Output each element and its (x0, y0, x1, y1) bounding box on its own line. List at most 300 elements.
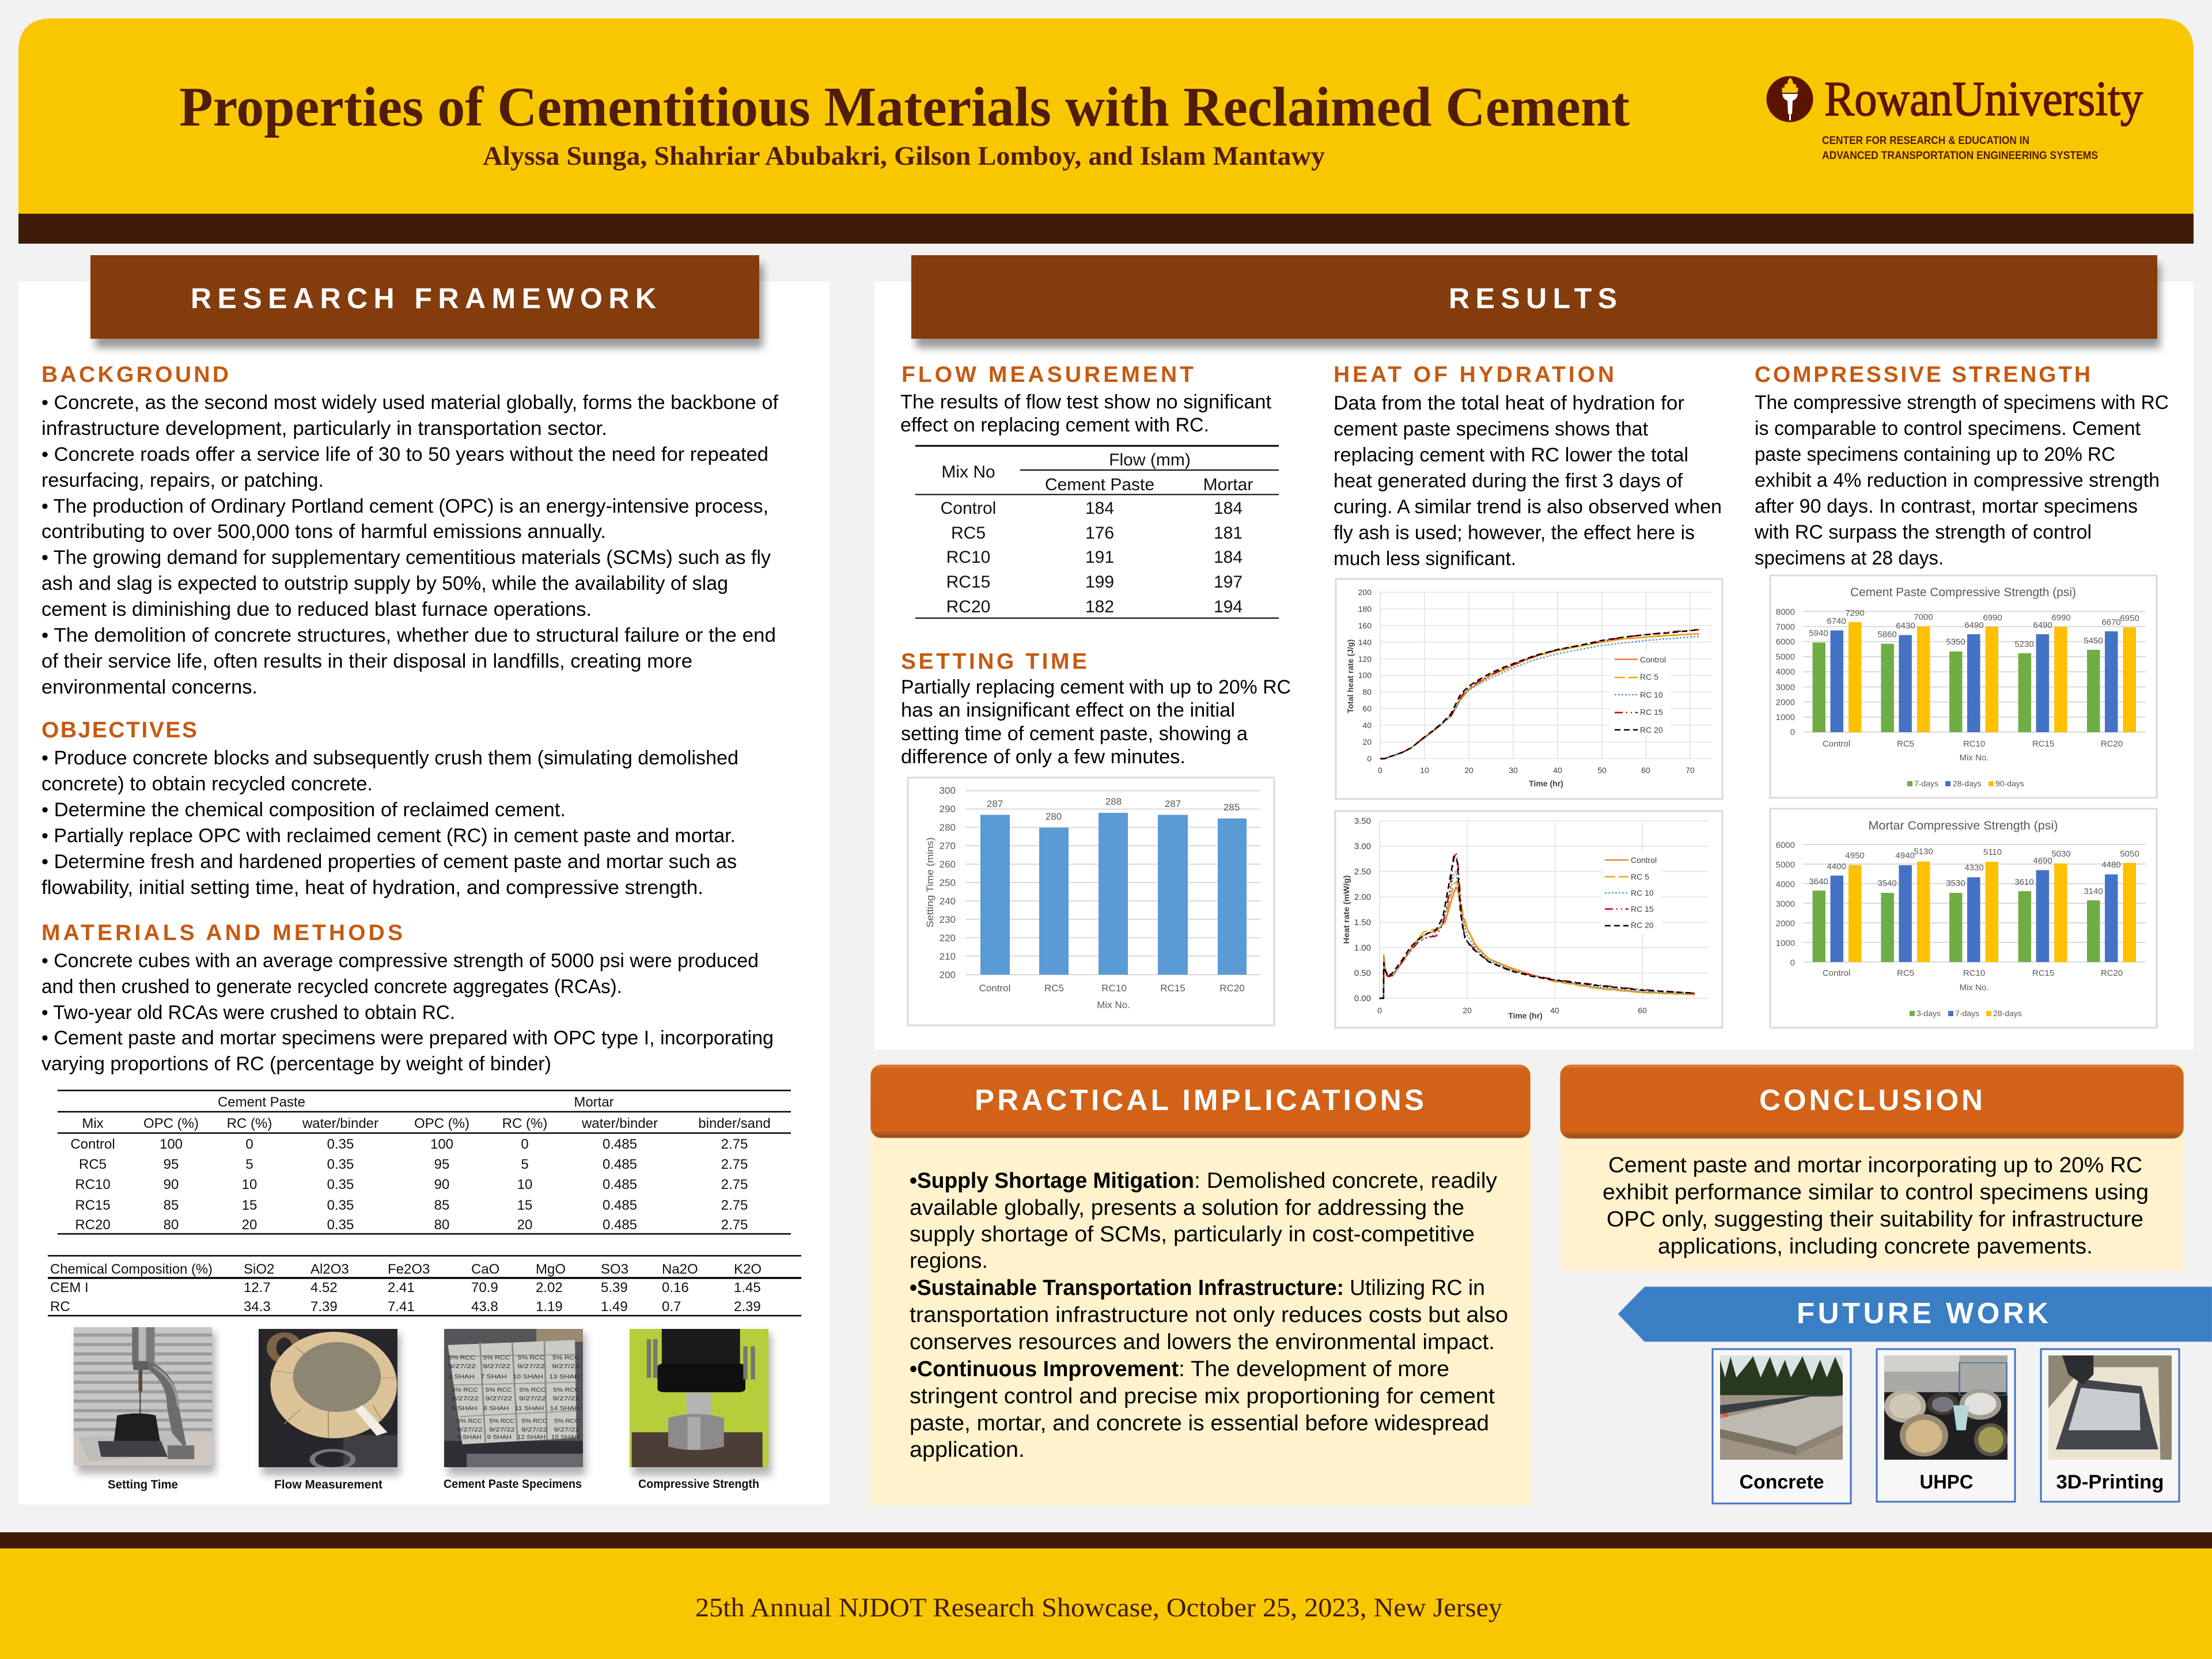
bar chart: mortar compressive strength: 3530 (1946, 878, 1965, 888)
chemical composition table: RC (50, 1299, 70, 1315)
line chart: total heat: 140 (1358, 638, 1372, 647)
mix proportions table: 0.35 (327, 1198, 354, 1213)
line chart: total heat: 80 (1362, 687, 1372, 696)
setting time text (901, 649, 1291, 768)
photo: cement paste specimens: 9/27/22 9/27/22 9/27/22 9/27/22 (448, 1363, 580, 1370)
bar chart: cement paste compressive strength: Control (1823, 739, 1850, 749)
mix proportions table: 85 (434, 1198, 449, 1213)
bar chart: setting time: 230 (940, 914, 956, 925)
flow measurement text: effect on replacing cement with RC. (900, 414, 1209, 436)
chemical composition table: 5.39 (601, 1280, 628, 1296)
chemical composition table: MgO (536, 1262, 566, 1277)
bar chart: mortar compressive strength: 2000 (1776, 919, 1795, 929)
mix proportions table: 100 (430, 1137, 453, 1152)
bar chart: cement paste compressive strength: 7290 (1845, 608, 1865, 618)
heading: research framework: RESEARCH FRAMEWORK (191, 282, 656, 315)
implications text: paste, mortar, and concrete is essential before widespread (910, 1411, 1489, 1435)
compressive strength text: with RC surpass the strength of control (1754, 521, 2092, 543)
bar chart: mortar compressive strength: 3000 (1776, 899, 1795, 909)
bar chart: cement paste compressive strength: 5000 (1776, 652, 1795, 662)
chemical composition table: Chemical Composition (%) (50, 1262, 213, 1277)
line chart: heat rate (1335, 811, 1722, 1028)
bar chart: cement paste compressive strength: 5940 (1809, 628, 1828, 638)
heading: results (911, 255, 2157, 339)
bar chart: mortar compressive strength: Control (1823, 968, 1850, 978)
bar chart: setting time: 270 (940, 840, 956, 851)
line chart: total heat: 120 (1358, 654, 1372, 664)
future work arrow banner: FUTURE WORK (1797, 1297, 2048, 1330)
chemical composition table: 70.9 (471, 1280, 498, 1296)
line chart: total heat: 50 (1597, 766, 1607, 775)
bar chart: setting time: 288 (1105, 796, 1122, 807)
bar chart: cement paste compressive strength: 1000 (1776, 713, 1795, 722)
line chart: heat rate: 2.00 (1354, 892, 1371, 902)
heat of hydration text: replacing cement with RC lower the total (1334, 444, 1688, 466)
heat of hydration text: much less significant. (1334, 548, 1516, 570)
bar chart: setting time: Mix No. (1097, 999, 1130, 1010)
objectives section: concrete) to obtain recycled concrete. (41, 773, 373, 795)
bar chart: setting time: Setting Time (mins) (925, 838, 935, 927)
bar chart: cement paste compressive strength: 7-days (1914, 779, 1938, 788)
photo: cement paste specimens: 5% RCC 5% RCC 5% RCC 5% RCC (448, 1355, 579, 1361)
chemical composition table: 12.7 (244, 1280, 271, 1296)
chemical composition table: 2.02 (536, 1280, 563, 1296)
line chart: total heat: RC 15 (1640, 707, 1663, 717)
mix proportions table: RC20 (75, 1217, 111, 1233)
bar chart: mortar compressive strength: RC15 (2032, 968, 2054, 978)
mix proportions table: 10 (242, 1177, 257, 1192)
flow table: 197 (1214, 573, 1243, 592)
background section: ash and slag is expected to outstrip supply by 50%, while the availability of slag (41, 573, 728, 594)
compressive strength text: after 90 days. In contrast, mortar specimens (1755, 495, 2138, 517)
mix proportions table: 5 (245, 1157, 253, 1172)
mix proportions table: 0.485 (603, 1217, 637, 1233)
chemical composition table: CEM I (50, 1280, 89, 1296)
mix proportions table: RC15 (75, 1198, 111, 1213)
logo: Rowan University: CENTER FOR RESEARCH & EDUCATION IN (1822, 135, 2029, 147)
objectives section (41, 718, 738, 899)
implications text: regions. (910, 1249, 988, 1273)
panel: research framework (18, 255, 830, 1505)
objectives section: • Partially replace OPC with reclaimed cement (RC) in cement paste and mortar. (41, 825, 736, 847)
bar chart: cement paste compressive strength: 6000 (1776, 637, 1795, 647)
mix proportions table: 100 (160, 1137, 183, 1152)
bar chart: cement paste compressive strength: 3000 (1776, 683, 1795, 692)
compressive strength text (1754, 362, 2169, 569)
label: 3D-Printing (2056, 1471, 2164, 1493)
line chart: heat rate: Heat rate (mW/g) (1342, 876, 1351, 944)
flow table: Control (941, 499, 996, 518)
chemical composition table: 1.45 (734, 1280, 761, 1296)
objectives section: • Determine the chemical composition of reclaimed cement. (41, 799, 566, 821)
mix proportions table: 0.485 (603, 1198, 637, 1213)
mix proportions table: RC (%) (227, 1116, 272, 1131)
mix proportions table: 15 (242, 1198, 257, 1213)
future work arrow banner (1618, 1287, 2212, 1342)
implications text: supply shortage of SCMs, particularly in cost-competitive (910, 1222, 1475, 1247)
line chart: heat rate: 0.00 (1354, 994, 1371, 1003)
bar chart: mortar compressive strength: 3640 (1809, 877, 1828, 887)
mix proportions table: Cement Paste (218, 1094, 305, 1110)
heat of hydration text: heat generated during the first 3 days of (1334, 470, 1683, 492)
implications text: conserves resources and lowers the environmental impact. (910, 1330, 1495, 1354)
line chart: heat rate: 40 (1550, 1006, 1559, 1015)
implications text: •Continuous Improvement (910, 1357, 1179, 1381)
mix proportions table: Mix (82, 1116, 104, 1131)
bar chart: cement paste compressive strength: Cement Paste Compressive Strength (psi) (1850, 586, 2076, 599)
bar chart: setting time: Control (979, 983, 1010, 994)
implications text (910, 1169, 1508, 1462)
line chart: total heat: 10 (1420, 766, 1429, 775)
implications text: stringent control and precise mix proportioning for cement (910, 1384, 1495, 1408)
future work card: 3D-printing (2041, 1349, 2179, 1502)
setting time text: SETTING TIME (901, 649, 1087, 674)
panel: conclusion (1560, 1065, 2184, 1271)
chemical composition table: SiO2 (244, 1262, 274, 1277)
bar chart: mortar compressive strength (1770, 809, 2157, 1028)
chemical composition table: Fe2O3 (388, 1262, 430, 1277)
flow table: RC20 (946, 597, 990, 616)
flow table: RC15 (946, 573, 990, 592)
objectives section: OBJECTIVES (41, 718, 197, 743)
bar chart: mortar compressive strength: 5030 (2051, 849, 2071, 859)
chemical composition table: SO3 (601, 1262, 628, 1277)
setting time text: setting time of cement paste, showing a (901, 723, 1248, 745)
photo: cement paste specimens: 5% RCC 5% RCC 5% RCC 5% RCC (452, 1387, 579, 1393)
flow table (915, 446, 1279, 618)
flow table: 182 (1085, 597, 1114, 616)
bar chart: cement paste compressive strength: 0 (1790, 728, 1795, 737)
photo: cement paste specimens: 9/27/22 9/27/22 9/27/22 9/27/22 (457, 1427, 580, 1433)
line chart: total heat: 40 (1362, 721, 1372, 730)
mix proportions table: 80 (434, 1217, 449, 1233)
flow table: 176 (1085, 524, 1114, 543)
bar chart: mortar compressive strength: 5110 (1983, 847, 2002, 857)
objectives section: • Produce concrete blocks and subsequently crush them (simulating demolished (41, 747, 738, 769)
header band (18, 18, 2194, 244)
caption: Cement Paste Specimens (444, 1478, 582, 1491)
bar chart: mortar compressive strength: 4480 (2101, 860, 2121, 870)
line chart: heat rate: RC 5 (1631, 872, 1649, 881)
flow table: 199 (1085, 573, 1114, 592)
flow measurement text: FLOW MEASUREMENT (902, 362, 1194, 387)
chemical composition table: 7.39 (310, 1299, 338, 1315)
mix proportions table: RC5 (79, 1157, 107, 1172)
line chart: total heat: 180 (1358, 604, 1372, 613)
heading: practical implications (871, 1065, 1530, 1138)
caption: Compressive Strength (638, 1478, 759, 1491)
implications text: : Demolished concrete, readily (1194, 1169, 1497, 1193)
conclusion text (1603, 1153, 2149, 1259)
bar chart: cement paste compressive strength: 90-days (1995, 779, 2024, 788)
heat of hydration text (1334, 362, 1722, 570)
chemical composition table: 0.7 (662, 1299, 681, 1315)
implications text: transportation infrastructure not only reduces costs but also (910, 1303, 1508, 1327)
bar chart: setting time: 287 (1165, 798, 1181, 809)
title: Properties of Cementitious Materials with Reclaimed Cement (179, 76, 1630, 138)
background section: resurfacing, repairs, or patching. (41, 469, 324, 491)
bar chart: setting time: 210 (940, 951, 956, 962)
mix proportions table: 20 (517, 1217, 532, 1233)
line chart: heat rate: Control (1631, 855, 1657, 865)
bar chart: setting time: 250 (940, 877, 956, 888)
line chart: heat rate: 20 (1463, 1006, 1472, 1015)
bar chart: cement paste compressive strength: 6670 (2101, 618, 2121, 627)
mix proportions table: 85 (164, 1198, 179, 1213)
mix proportions table: 2.75 (721, 1137, 748, 1152)
mix proportions table: 10 (517, 1177, 532, 1192)
materials and methods section: and then crushed to generate recycled concrete aggregates (RCAs). (41, 976, 622, 998)
panel: results (874, 255, 2194, 1050)
bar chart: setting time: RC15 (1160, 983, 1185, 994)
line chart: total heat: 70 (1685, 766, 1695, 775)
mix proportions table: 0.35 (327, 1177, 354, 1192)
authors: Alyssa Sunga, Shahriar Abubakri, Gilson Lomboy, and Islam Mantawy (483, 141, 1325, 171)
chemical composition table: 7.41 (388, 1299, 415, 1315)
photo: cement paste specimens: 9/27/22 9/27/22 9/27/22 9/27/22 (452, 1396, 580, 1402)
bar chart: mortar compressive strength: 7-days (1955, 1009, 1979, 1018)
line chart: heat rate: 1.00 (1354, 943, 1371, 953)
background section: • Concrete, as the second most widely used material globally, forms the backbone of (41, 392, 779, 414)
line chart: heat rate: 0 (1377, 1006, 1382, 1015)
mix proportions table: Control (70, 1137, 115, 1152)
background section: • The demolition of concrete structures, whether due to structural failure or the end (41, 624, 776, 646)
background section: of their service life, often results in their disposal in landfills, creating more (41, 650, 692, 672)
photo: flow measurement (259, 1329, 400, 1491)
bar chart: mortar compressive strength: 5130 (1914, 847, 1933, 857)
materials and methods section: • Concrete cubes with an average compressive strength of 5000 psi were produced (41, 950, 759, 972)
background section: infrastructure development, particularly in transportation sector. (41, 418, 607, 440)
objectives section: flowability, initial setting time, heat of hydration, and compressive strength. (41, 877, 703, 899)
compressive strength text: COMPRESSIVE STRENGTH (1755, 362, 2090, 387)
bar chart: mortar compressive strength: 3610 (2014, 877, 2034, 887)
panel: practical implications (870, 1065, 1531, 1505)
background section: BACKGROUND (41, 362, 229, 387)
label: UHPC (1919, 1471, 1974, 1493)
flow measurement text (900, 362, 1272, 436)
line chart: total heat: 20 (1362, 737, 1372, 747)
bar chart: mortar compressive strength: 3140 (2084, 887, 2103, 896)
line chart: heat rate: 1.50 (1354, 918, 1371, 927)
background section: environmental concerns. (41, 676, 257, 698)
background section: contributing to over 500,000 tons of harmful emissions annually. (41, 521, 606, 543)
bar chart: cement paste compressive strength: 7000 (1914, 612, 1933, 622)
bar chart: cement paste compressive strength: 6430 (1896, 621, 1915, 631)
background section: • Concrete roads offer a service life of 30 to 50 years without the need for repeated (41, 444, 768, 465)
line chart: total heat: 30 (1509, 766, 1518, 775)
mix proportions table: OPC (%) (414, 1116, 469, 1131)
logo: Rowan University: RowanUniversity (1824, 71, 2143, 126)
mix proportions table: Mortar (574, 1094, 614, 1110)
bar chart: cement paste compressive strength: 6490 (2033, 620, 2052, 630)
implications text: •Supply Shortage Mitigation (910, 1169, 1194, 1193)
background section: • The production of Ordinary Portland cement (OPC) is an energy-intensive process, (41, 495, 768, 517)
mix proportions table: RC (%) (502, 1116, 547, 1131)
flow table: RC10 (946, 548, 990, 567)
line chart: total heat (1336, 579, 1722, 799)
bar chart: cement paste compressive strength: 5350 (1946, 637, 1965, 647)
flow table: Mix No (941, 463, 995, 482)
bar chart: setting time: 220 (940, 933, 956, 944)
compressive strength text: The compressive strength of specimens with RC (1755, 392, 2169, 414)
line chart: total heat: RC 5 (1640, 672, 1658, 681)
bar chart: mortar compressive strength: 6000 (1776, 840, 1795, 850)
line chart: total heat: 60 (1362, 704, 1372, 713)
conclusion text: Cement paste and mortar incorporating up to 20% RC (1608, 1153, 2142, 1177)
chemical composition table: CaO (471, 1262, 499, 1277)
bar chart: cement paste compressive strength: RC20 (2101, 739, 2123, 749)
materials and methods section: varying proportions of RC (percentage by weight of binder) (41, 1053, 551, 1075)
flow measurement text: The results of flow test show no significant (900, 391, 1272, 413)
line chart: heat rate: Time (hr) (1508, 1011, 1543, 1020)
mix proportions table: 0.485 (603, 1137, 637, 1152)
flow table: 184 (1214, 548, 1243, 567)
bar chart: setting time: RC20 (1219, 983, 1245, 994)
setting time text: Partially replacing cement with up to 20% RC (901, 676, 1291, 698)
line chart: total heat: Control (1640, 655, 1666, 664)
mix proportions table: 0.35 (327, 1157, 354, 1172)
bar chart: cement paste compressive strength: 6740 (1827, 616, 1846, 626)
photo: cement paste specimens: 6 SHAH 9 SHAH 12 SHAH 15 SHAH (457, 1434, 579, 1441)
bar chart: setting time: RC10 (1101, 983, 1127, 994)
mix proportions table: OPC (%) (143, 1116, 199, 1131)
compressive strength text: is comparable to control specimens. Cement (1755, 418, 2141, 440)
caption: Flow Measurement (274, 1478, 382, 1491)
compressive strength text: paste specimens containing up to 20% RC (1755, 444, 2115, 465)
mix proportions table: RC10 (75, 1177, 111, 1192)
conclusion text: OPC only, suggesting their suitability for infrastructure (1607, 1207, 2143, 1232)
heading: results: RESULTS (1449, 282, 1617, 315)
mix proportions table: 20 (242, 1217, 257, 1233)
bar chart: setting time: 280 (1046, 811, 1062, 822)
mix proportions table: 95 (164, 1157, 179, 1172)
line chart: total heat: Time (hr) (1529, 779, 1563, 788)
photo: cement paste specimens (444, 1329, 586, 1491)
bar chart: mortar compressive strength: RC5 (1897, 968, 1914, 978)
bar chart: mortar compressive strength: 4330 (1964, 863, 1984, 873)
flow table: Flow (mm) (1109, 450, 1191, 469)
bar chart: cement paste compressive strength: 5450 (2084, 636, 2103, 646)
flow table: 184 (1214, 499, 1243, 518)
photo: cement paste specimens: 5 SHAH 8 SHAH 11 SHAH 14 SHAH (452, 1406, 579, 1412)
chemical composition table: 2.41 (388, 1280, 415, 1296)
background section: cement is diminishing due to reduced blast furnace operations. (41, 599, 592, 620)
heat of hydration text: Data from the total heat of hydration for (1334, 392, 1684, 414)
line chart: heat rate: 60 (1638, 1006, 1647, 1015)
bar chart: cement paste compressive strength: 6490 (1964, 620, 1984, 630)
heat of hydration text: curing. A similar trend is also observed when (1334, 496, 1722, 518)
mix proportions table: binder/sand (698, 1116, 771, 1131)
flow table: 181 (1214, 524, 1243, 543)
line chart: total heat: 160 (1358, 621, 1372, 630)
mix proportions table: 0.485 (603, 1177, 637, 1192)
chemical composition table: 0.16 (662, 1280, 689, 1296)
mix proportions table: 0.35 (327, 1217, 354, 1233)
mix proportions table (58, 1090, 791, 1234)
line chart: total heat: 200 (1358, 588, 1372, 597)
logo: Rowan University: ADVANCED TRANSPORTATION ENGINEERING SYSTEMS (1822, 150, 2098, 162)
photo: cement paste specimens: 5% RCC 5% RCC 5% RCC 5% RCC (457, 1418, 579, 1425)
bar chart: mortar compressive strength: 28-days (1993, 1009, 2022, 1018)
bar chart: setting time: 240 (940, 896, 956, 907)
bar chart: setting time: RC5 (1044, 983, 1064, 994)
background section (41, 362, 779, 698)
chemical composition table: 43.8 (471, 1299, 498, 1315)
materials and methods section (41, 921, 774, 1075)
bar chart: cement paste compressive strength (1770, 575, 2157, 798)
heat of hydration text: fly ash is used; however, the effect here is (1334, 522, 1695, 544)
line chart: total heat: 60 (1641, 766, 1650, 775)
bar chart: cement paste compressive strength: 6990 (2051, 613, 2071, 623)
line chart: heat rate: RC 20 (1631, 921, 1654, 930)
implications text: application. (910, 1438, 1025, 1462)
line chart: total heat: 20 (1464, 766, 1474, 775)
mix proportions table: 2.75 (721, 1157, 748, 1172)
heading: research framework (90, 255, 759, 339)
logo: Rowan University (1766, 71, 2143, 162)
mix proportions table: 2.75 (721, 1198, 748, 1213)
materials and methods section: • Two-year old RCAs were crushed to obtain RC. (41, 1002, 455, 1024)
bar chart: setting time: 300 (940, 785, 956, 796)
bar chart: cement paste compressive strength: 8000 (1776, 607, 1795, 617)
bar chart: mortar compressive strength: 5000 (1776, 860, 1795, 870)
bar chart: cement paste compressive strength: 2000 (1776, 698, 1795, 707)
flow table: 191 (1085, 548, 1114, 567)
bar chart: mortar compressive strength: 4950 (1845, 851, 1865, 861)
chemical composition table: Na2O (662, 1262, 698, 1277)
bar chart: setting time: 285 (1224, 802, 1240, 813)
bar chart: mortar compressive strength: 4000 (1776, 880, 1795, 889)
materials and methods section: • Cement paste and mortar specimens were prepared with OPC type I, incorporating (41, 1027, 774, 1049)
flow table: 194 (1214, 597, 1243, 616)
mix proportions table: 0 (521, 1137, 529, 1152)
line chart: heat rate: 3.50 (1354, 816, 1371, 826)
bar chart: mortar compressive strength: 4400 (1827, 862, 1846, 872)
bar chart: cement paste compressive strength: 4000 (1776, 667, 1795, 677)
setting time text: has an insignificant effect on the initial (901, 699, 1235, 721)
flow table: Mortar (1203, 475, 1253, 494)
heading: conclusion: CONCLUSION (1759, 1084, 1983, 1116)
bar chart: cement paste compressive strength: 7000 (1776, 622, 1795, 632)
footer band (0, 1532, 2212, 1659)
flow table: RC5 (951, 524, 986, 543)
bar chart: cement paste compressive strength: 6950 (2120, 613, 2139, 623)
bar chart: mortar compressive strength: 4940 (1895, 851, 1915, 861)
flow table: Cement Paste (1045, 475, 1154, 494)
mix proportions table: 80 (164, 1217, 179, 1233)
line chart: total heat: 0 (1367, 754, 1372, 763)
bar chart: cement paste compressive strength: Mix No. (1960, 753, 1988, 763)
mix proportions table: water/binder (581, 1116, 658, 1131)
chemical composition table: 4.52 (310, 1280, 338, 1296)
compressive strength text: specimens at 28 days. (1755, 547, 1944, 569)
implications text: : The development of more (1179, 1357, 1449, 1381)
conclusion text: exhibit performance similar to control specimens using (1603, 1180, 2149, 1205)
implications text: Utilizing RC in (1350, 1276, 1485, 1300)
footer text: 25th Annual NJDOT Research Showcase, October 25, 2023, New Jersey (695, 1593, 1503, 1623)
bar chart: setting time (908, 778, 1274, 1025)
line chart: heat rate: 2.50 (1354, 867, 1371, 877)
bar chart: mortar compressive strength: 5050 (2120, 849, 2139, 859)
line chart: heat rate: 0.50 (1354, 968, 1371, 978)
implications text: •Sustainable Transportation Infrastructure: (910, 1276, 1344, 1300)
bar chart: mortar compressive strength: RC20 (2101, 968, 2123, 978)
materials and methods section: MATERIALS AND METHODS (41, 921, 403, 945)
bar chart: cement paste compressive strength: RC5 (1897, 739, 1914, 749)
setting time text: difference of only a few minutes. (901, 746, 1185, 768)
bar chart: cement paste compressive strength: RC10 (1963, 739, 1985, 749)
compressive strength text: exhibit a 4% reduction in compressive strength (1755, 469, 2160, 491)
